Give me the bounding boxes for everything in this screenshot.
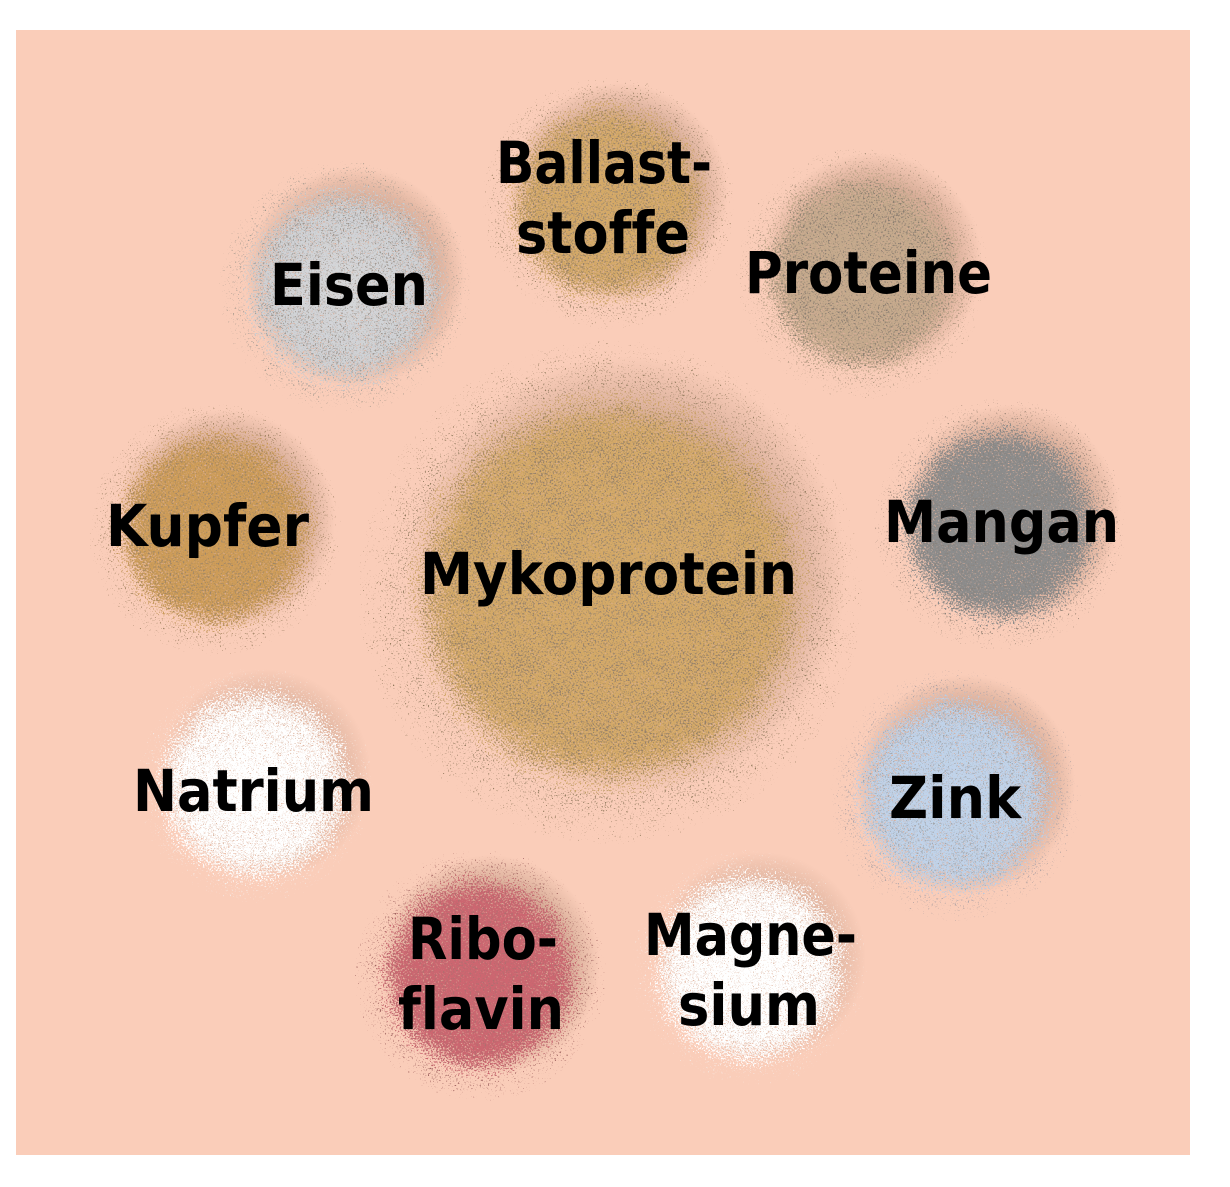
powder: Eisen bbox=[219, 161, 471, 413]
label: Magnesium: sium bbox=[678, 971, 820, 1039]
label: Natrium: Natrium bbox=[133, 757, 374, 825]
powder: Mykoprotein bbox=[358, 340, 862, 844]
powder: Ballaststoffe bbox=[482, 77, 734, 329]
powder: Natrium bbox=[133, 667, 374, 903]
label: Mykoprotein: Mykoprotein bbox=[420, 540, 797, 608]
label: Riboflavin: flavin bbox=[398, 975, 564, 1043]
powder: Riboflavin bbox=[354, 849, 606, 1101]
powder: Proteine bbox=[736, 147, 992, 399]
label: Eisen: Eisen bbox=[270, 251, 428, 319]
label: Magnesium bbox=[644, 901, 857, 1039]
label: Magnesium: Magne- bbox=[644, 901, 857, 969]
label: Mangan: Mangan bbox=[884, 488, 1119, 556]
label: Proteine: Proteine bbox=[745, 239, 992, 307]
label: Ballaststoffe: Ballast- bbox=[496, 129, 712, 197]
label: Zink: Zink bbox=[889, 764, 1022, 832]
powder: Zink bbox=[829, 669, 1081, 921]
label: Riboflavin bbox=[398, 905, 564, 1043]
powder: Kupfer bbox=[89, 404, 341, 656]
label: Kupfer: Kupfer bbox=[106, 492, 309, 560]
powder: Mangan bbox=[874, 399, 1126, 651]
label: Riboflavin: Ribo- bbox=[408, 905, 558, 973]
label: Ballaststoffe: stoffe bbox=[516, 199, 690, 267]
label: Ballaststoffe bbox=[496, 129, 712, 267]
powder: Magnesium bbox=[632, 850, 868, 1086]
